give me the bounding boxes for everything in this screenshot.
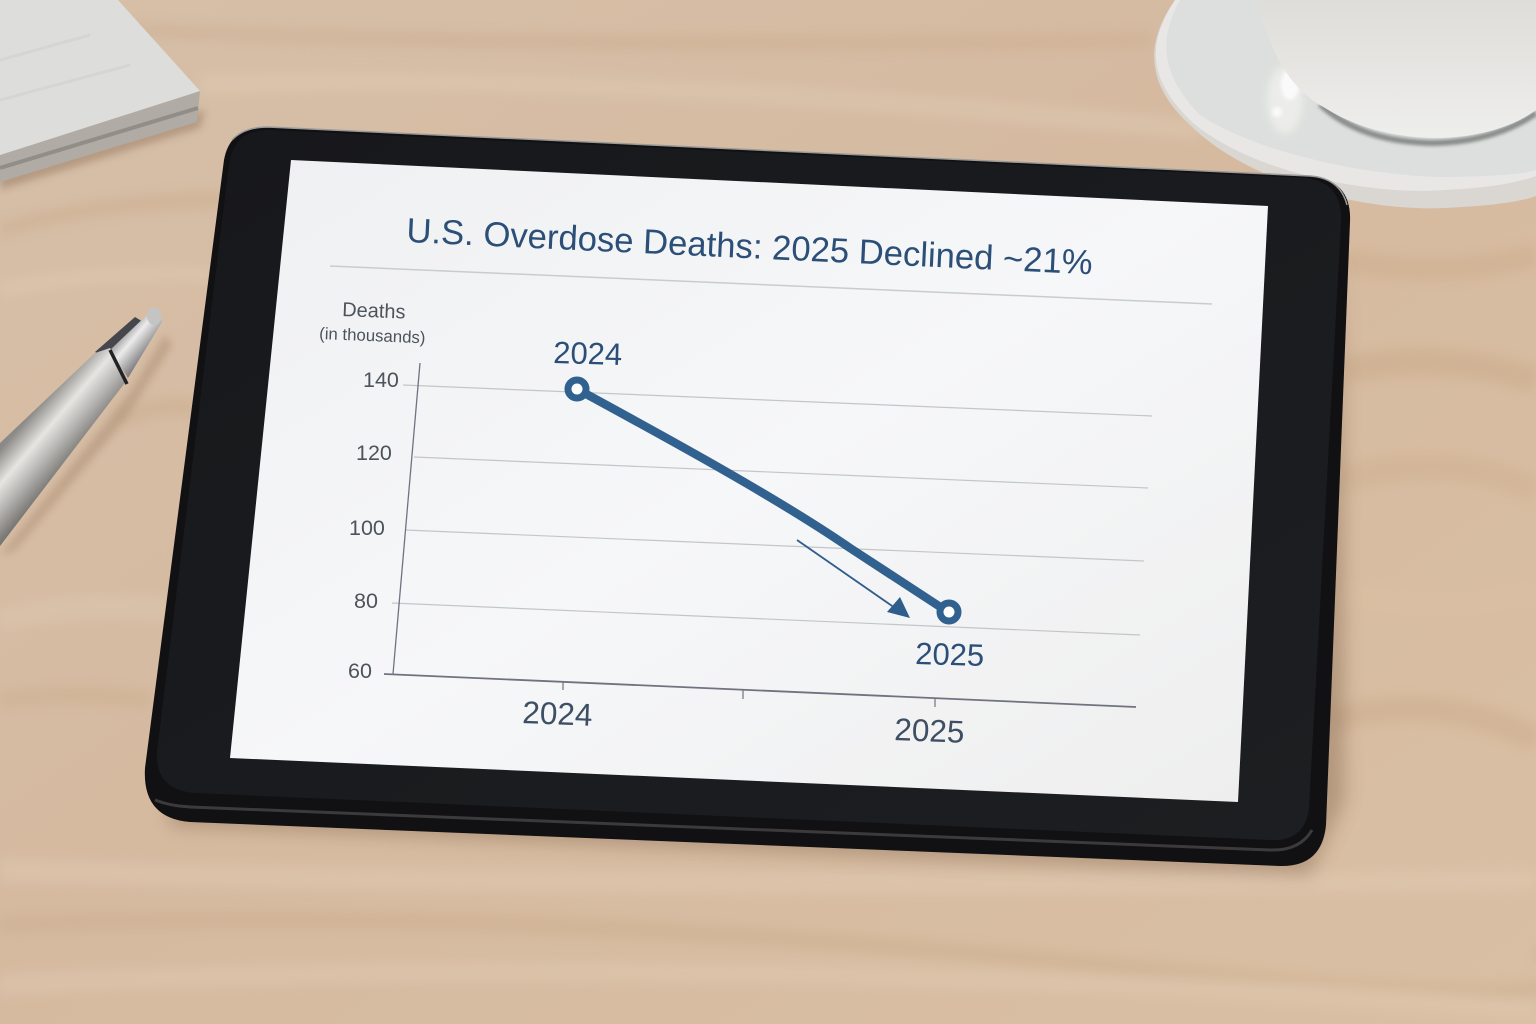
- data line 2024 to 2025: [577, 389, 948, 612]
- x axis labels: 2025: [894, 711, 965, 750]
- axes: [384, 363, 1136, 707]
- notebook: [0, 0, 205, 190]
- saucer rim: [1156, 0, 1536, 191]
- chart title: U.S. Overdose Deaths: 2025 Declined ~21%: [406, 212, 1093, 282]
- cup: [1258, 0, 1536, 138]
- y axis labels: 120: [356, 441, 392, 465]
- body rim highlight: [232, 127, 1347, 205]
- gridlines: [392, 385, 1152, 635]
- label 2025: 2025: [915, 636, 985, 673]
- y axis title: Deaths: [342, 299, 406, 324]
- x axis labels: [522, 694, 965, 750]
- point 2025: [940, 603, 958, 621]
- saucer outer: [1154, 0, 1536, 208]
- y axis title: (in thousands): [319, 324, 426, 347]
- pen: [0, 307, 172, 556]
- tablet bezel: [157, 130, 1341, 840]
- label 2024: 2024: [553, 335, 623, 372]
- x axis labels: 2024: [522, 694, 593, 733]
- trend arrow: [797, 540, 910, 618]
- y axis title: [319, 299, 426, 347]
- y axis labels: 140: [363, 368, 399, 392]
- y axis labels: 100: [349, 516, 385, 540]
- cup shadow: [1320, 104, 1536, 143]
- point 2024: [568, 380, 586, 398]
- title rule: [330, 266, 1212, 304]
- saucer well: [1166, 0, 1536, 177]
- y axis labels: [348, 368, 399, 683]
- tablet shadow: [170, 250, 1345, 875]
- y axis labels: 60: [348, 659, 372, 683]
- tablet body edge: [145, 127, 1350, 866]
- screen: [230, 160, 1268, 802]
- saucer highlight: [1267, 66, 1303, 134]
- y axis labels: 80: [354, 589, 378, 613]
- coffee cup and saucer: [1154, 0, 1536, 208]
- tablet: [145, 127, 1350, 866]
